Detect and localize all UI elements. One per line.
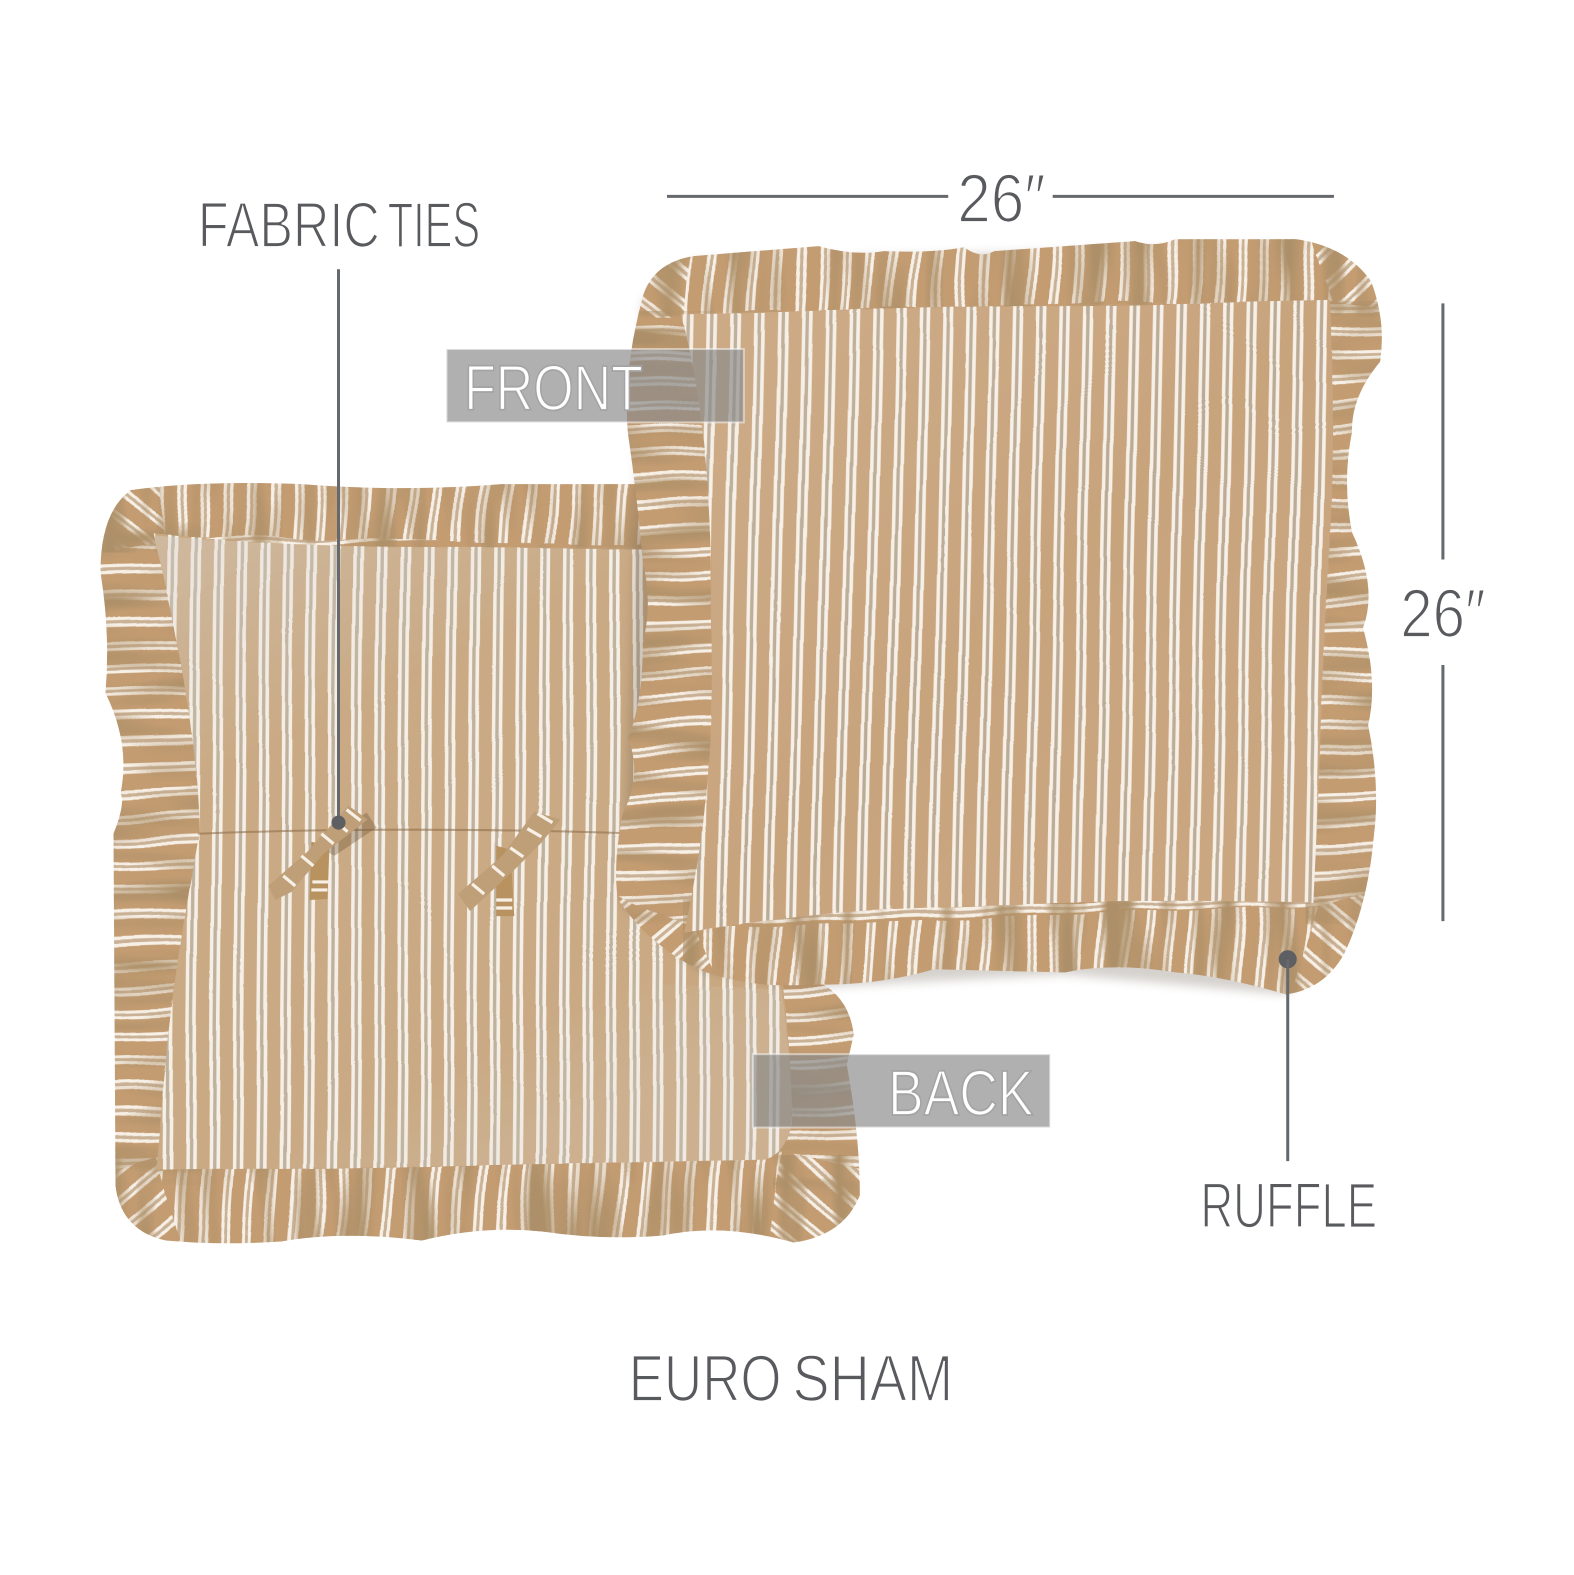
title: euro sham: SHAM bbox=[793, 1342, 953, 1416]
back sham pillow bbox=[100, 483, 860, 1244]
label: back: BACK bbox=[888, 1057, 1034, 1129]
back panel fabric bbox=[154, 535, 904, 1170]
front sham shadow bbox=[623, 246, 1336, 994]
front sham pillow bbox=[616, 239, 1382, 994]
front panel fabric bbox=[681, 299, 1333, 932]
title: euro sham: EURO bbox=[629, 1342, 781, 1416]
callout: fabric ties: TIES bbox=[388, 189, 480, 261]
callout: fabric ties: FABRIC bbox=[198, 189, 380, 261]
callout: ruffle bbox=[1200, 950, 1377, 1241]
back closure seam bbox=[198, 830, 643, 834]
label: back bbox=[753, 1054, 1050, 1129]
back panel shading bbox=[154, 535, 792, 1170]
dimension: height 26 inches: 26″ bbox=[1400, 576, 1486, 652]
front ruffle bbox=[616, 239, 1382, 994]
dimension: width 26 inches: 26″ bbox=[957, 161, 1046, 237]
fabric tie left bbox=[268, 806, 377, 900]
front panel shading bbox=[681, 299, 1333, 932]
callout: ruffle: RUFFLE bbox=[1200, 1169, 1377, 1241]
fabric tie right bbox=[458, 812, 560, 916]
label: front: FRONT bbox=[464, 352, 643, 424]
back ruffle bbox=[100, 483, 860, 1244]
title: euro sham bbox=[629, 1342, 953, 1416]
callout: fabric ties bbox=[198, 189, 480, 830]
